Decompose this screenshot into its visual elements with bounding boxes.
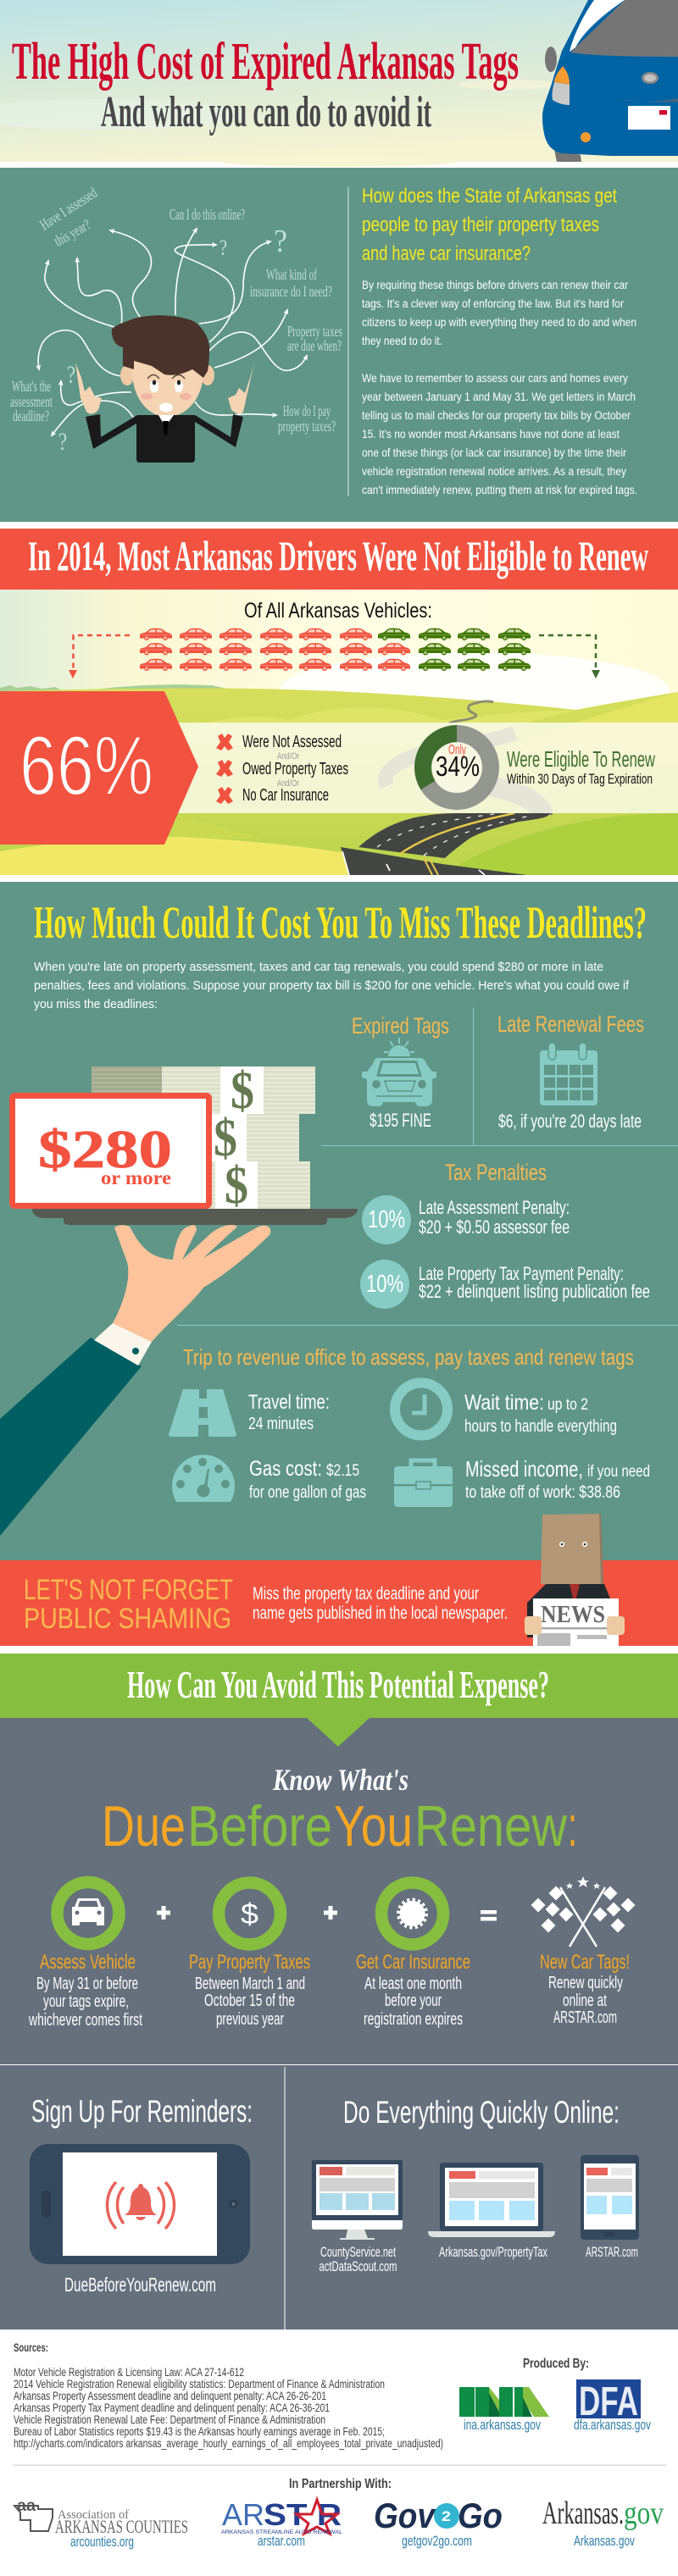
penalty 1: $20 + $0.50 assessor fee xyxy=(419,1216,570,1238)
question labels: How do I pay xyxy=(283,402,331,419)
logo: Gov2Go xyxy=(374,2496,503,2535)
panel: footer: arstar.com xyxy=(258,2533,305,2549)
illustration: man with bag and newspaper xyxy=(525,1514,625,1646)
travel time xyxy=(248,1391,330,1433)
brand heading xyxy=(102,1794,577,1859)
icon: x marks xyxy=(216,734,233,804)
illustration: cash stacks: $ xyxy=(225,1157,248,1215)
missed income xyxy=(465,1456,650,1502)
logo: association of arkansas counties: ARKANSAS COUNTIES xyxy=(55,2516,188,2537)
sources: Arkansas Property Assessment deadline and delinquent penalty: ACA 26-26-201 xyxy=(14,2390,326,2402)
tax penalties: Tax Penalties xyxy=(445,1160,547,1185)
panel: footer: Arkansas.gov xyxy=(574,2533,635,2549)
logo: Arkansas.gov: gov xyxy=(624,2496,664,2531)
sources: Sources: xyxy=(14,2341,48,2354)
intro heading: people to pay their property taxes xyxy=(362,213,599,236)
brand heading: You xyxy=(334,1794,413,1859)
step: pay property taxes: previous year xyxy=(216,2010,284,2029)
step: pay property taxes: Pay Property Taxes xyxy=(189,1951,310,1974)
sources: Arkansas Property Tax Payment deadline and delinquent penalty: ACA 26-36-201 xyxy=(14,2401,330,2414)
tax penalties xyxy=(360,1160,650,1309)
illustration: cash stacks: $ xyxy=(231,1062,254,1120)
donut chart: 34 percent xyxy=(423,734,491,801)
late renewal fees xyxy=(497,1011,644,1132)
site labels xyxy=(319,2244,638,2274)
logo: Gov2Go: 2 xyxy=(442,2508,451,2524)
panel: header xyxy=(0,0,678,167)
reasons list: And/Or xyxy=(277,751,299,762)
logo: association of arkansas counties xyxy=(14,2497,188,2537)
online services xyxy=(312,2095,639,2274)
question labels: insurance do I need? xyxy=(250,283,332,300)
logo: Gov2Go: Go xyxy=(458,2496,503,2535)
intro body text: telling us to mail checks for our property tax bills by October xyxy=(362,409,631,422)
intro body text: citizens to keep up with everything they need to do and when xyxy=(362,316,636,329)
question labels: Can I do this online? xyxy=(170,206,245,223)
step: assess vehicle xyxy=(28,1882,142,2030)
penalty 1: Late Assessment Penalty: xyxy=(419,1197,570,1218)
brand heading: Renew xyxy=(414,1794,568,1859)
step: assess vehicle: By May 31 or before xyxy=(36,1975,138,1993)
icon: car xyxy=(58,1882,119,1944)
question labels: property taxes? xyxy=(278,418,336,435)
step: new car tags xyxy=(531,1876,635,2027)
trip to revenue office xyxy=(169,1344,650,1507)
logo: Arkansas.gov: Arkansas. xyxy=(542,2496,624,2531)
donut chart: 34 percent: 34% xyxy=(436,751,480,782)
question labels: deadline? xyxy=(13,407,49,424)
panel: public shaming xyxy=(0,1514,678,1646)
intro body text: they need to do it. xyxy=(362,335,442,347)
arrow: dashed red xyxy=(69,635,130,679)
step: new car tags: ARSTAR.com xyxy=(553,2008,617,2027)
icon: plus xyxy=(324,1906,337,1920)
donut chart: 34 percent: Only xyxy=(448,743,466,757)
site labels: ARSTAR.com xyxy=(586,2244,638,2260)
wait time xyxy=(464,1391,617,1436)
reminders: DueBeforeYouRenew.com xyxy=(64,2274,216,2296)
callout: public shaming heading: PUBLIC SHAMING xyxy=(24,1603,231,1635)
intro body text: can't immediately renew, putting them at risk for expired tags. xyxy=(362,484,637,496)
wait time: Wait time: xyxy=(464,1391,544,1415)
callout: 66 percent: 66% xyxy=(19,718,153,812)
icon: calendar xyxy=(540,1043,597,1105)
man suit and hands xyxy=(75,363,254,463)
gas cost: $2.15 xyxy=(326,1462,359,1480)
logo: ARSTAR xyxy=(221,2497,343,2535)
panel: cost of missing deadlines xyxy=(0,882,678,1560)
step: get car insurance xyxy=(356,1882,470,2029)
panel: 2014 eligibility xyxy=(0,529,678,875)
reasons list: Owed Property Taxes xyxy=(242,760,348,778)
gas cost: for one gallon of gas xyxy=(249,1483,366,1502)
site labels: actDataScout.com xyxy=(319,2258,397,2274)
intro body text: one of these things (or lack car insurance) by the time their xyxy=(362,446,626,459)
icon: dollar: $ xyxy=(241,1898,258,1931)
question labels: ? xyxy=(58,428,67,456)
gas cost xyxy=(249,1457,366,1502)
callout: 66 percent xyxy=(0,691,198,845)
panel: how can you avoid xyxy=(0,1654,678,1718)
penalty 1: 10% xyxy=(368,1206,405,1233)
step: get car insurance: At least one month xyxy=(364,1975,462,1993)
partnership heading: In Partnership With: xyxy=(289,2477,392,2491)
step: pay property taxes xyxy=(189,1882,310,2029)
sources xyxy=(14,2341,443,2450)
gas cost: Gas cost: xyxy=(249,1457,322,1481)
logo: ARSTAR: AR xyxy=(222,2497,264,2532)
step: get car insurance: Get Car Insurance xyxy=(356,1951,470,1974)
body text: you miss the deadlines: xyxy=(34,998,158,1011)
illustration: hills and road xyxy=(0,684,678,875)
penalty 1 xyxy=(362,1195,570,1244)
icon: equals xyxy=(481,1910,497,1921)
body text: When you're late on property assessment, taxes and car tag renewals, you could spend $280 or more in late xyxy=(34,961,603,974)
intro body text: vehicle registration renewal notice arrives. As a result, they xyxy=(362,465,626,478)
produced by xyxy=(459,2357,651,2433)
sources: Bureau of Labor Statistics reports $19.43 is the Arkansas hourly earnings average in Feb. 2015; xyxy=(14,2425,385,2438)
logo: Gov2Go: Gov xyxy=(374,2496,436,2535)
intro body text: We have to remember to assess our cars and homes every xyxy=(362,372,628,385)
logo: association of arkansas counties: aa xyxy=(17,2497,36,2515)
icon: police car xyxy=(362,1038,436,1106)
question labels: What's the xyxy=(12,378,51,395)
illustration: confused man with arrows xyxy=(38,229,307,463)
body text xyxy=(34,961,630,1011)
text: newspaper note: name gets published in the local newspaper. xyxy=(253,1604,508,1623)
eligible label xyxy=(507,746,655,787)
produced by: ina.arkansas.gov xyxy=(464,2417,541,2433)
intro heading: How does the State of Arkansas get xyxy=(362,185,617,208)
script heading: Know What's xyxy=(272,1763,408,1797)
question labels: are due when? xyxy=(287,337,342,354)
icon: briefcase xyxy=(394,1460,453,1507)
icon: road xyxy=(169,1389,236,1437)
man hair and head xyxy=(112,315,214,417)
sources: Vehicle Registration Renewal Late Fee: Department of Finance & Administration xyxy=(14,2413,325,2426)
site labels: Arkansas.gov/PropertyTax xyxy=(439,2244,547,2260)
panel: footer: arcounties.org xyxy=(70,2534,134,2550)
callout: public shaming heading xyxy=(24,1574,233,1635)
heading: of all vehicles: Of All Arkansas Vehicles: xyxy=(244,599,432,623)
question labels: What kind of xyxy=(266,266,317,283)
expired tags: Expired Tags xyxy=(352,1013,449,1039)
icon: checkered flags xyxy=(531,1876,635,1947)
text: newspaper note xyxy=(253,1584,508,1623)
callout: 280 dollars: or more xyxy=(101,1167,171,1188)
question labels: Have I assessed xyxy=(36,184,100,233)
logo: association of arkansas counties: Association of xyxy=(58,2508,129,2522)
produced by: Produced By: xyxy=(523,2357,589,2371)
icon: tablet xyxy=(581,2155,639,2240)
icon: phone with bell xyxy=(30,2144,250,2264)
panel: footer: getgov2go.com xyxy=(402,2533,472,2549)
illustration: cash stacks xyxy=(92,1062,315,1215)
site labels: CountyService.net xyxy=(320,2244,396,2260)
intro body text xyxy=(362,279,637,496)
brand heading: Before xyxy=(187,1794,332,1859)
step: assess vehicle: Assess Vehicle xyxy=(40,1951,136,1974)
step: get car insurance: before your xyxy=(385,1992,442,2010)
body text: penalties, fees and violations. Suppose your property tax bill is $200 for one vehicle. Here's what you could owe if xyxy=(34,979,630,993)
brand heading: Due xyxy=(102,1794,186,1859)
callout: 280 dollars: $280 xyxy=(38,1119,172,1179)
panel: how does the state get people to pay xyxy=(0,168,678,522)
dividers xyxy=(177,1007,678,1325)
translucent band xyxy=(170,723,678,813)
step: assess vehicle: your tags expire, xyxy=(43,1992,129,2011)
question labels: this year? xyxy=(51,216,93,249)
arrow: dashed green xyxy=(539,635,600,679)
question labels: ? xyxy=(67,361,75,389)
illustration: cash stacks: $ xyxy=(214,1110,237,1167)
panel: due before you renew xyxy=(0,1718,678,2329)
sources: http://ycharts.com/indicators arkansas_average_hourly_earnings_of_all_employees_total_private_unadjusted) xyxy=(14,2437,443,2450)
illustration: blue car rear xyxy=(542,0,678,162)
wait time: up to 2 xyxy=(547,1396,588,1414)
logo: ARSTAR: ARKANSAS STREAMLINE AUTO RENEWAL xyxy=(221,2530,343,2535)
logo: INA xyxy=(459,2387,549,2417)
reasons list: No Car Insurance xyxy=(242,786,329,805)
question labels xyxy=(10,184,342,456)
penalty 2 xyxy=(360,1260,650,1309)
text: newspaper note: Miss the property tax deadline and your xyxy=(253,1584,479,1604)
logo: DFA: DFA xyxy=(579,2379,638,2424)
sources: Motor Vehicle Registration & Licensing Law: ACA 27-14-612 xyxy=(14,2366,244,2379)
icon: clock xyxy=(395,1382,447,1435)
icon: desktop xyxy=(312,2160,403,2240)
illustration: tray xyxy=(32,1209,358,1225)
step: new car tags: online at xyxy=(563,1992,607,2010)
question labels: assessment xyxy=(10,393,53,410)
reasons list xyxy=(216,733,348,805)
icon: badge xyxy=(381,1882,443,1945)
icon: gauge xyxy=(172,1454,235,1502)
question labels: ? xyxy=(220,235,227,260)
step: assess vehicle: whichever comes first xyxy=(28,2011,142,2030)
reasons list: And/Or xyxy=(277,778,299,789)
expired tags: $195 FINE xyxy=(370,1110,431,1131)
intro heading: and have car insurance? xyxy=(362,242,531,265)
step: new car tags: New Car Tags! xyxy=(540,1951,630,1974)
step: new car tags: Renew quickly xyxy=(548,1974,623,1992)
icon: plus xyxy=(157,1906,170,1920)
vehicle pictogram xyxy=(140,629,531,671)
intro body text: By requiring these things before drivers can renew their car xyxy=(362,279,628,291)
callout: 280 dollars xyxy=(12,1096,208,1206)
wait time: hours to handle everything xyxy=(464,1417,617,1436)
travel time: 24 minutes xyxy=(248,1415,314,1433)
expired tags xyxy=(352,1013,449,1131)
step: pay property taxes: Between March 1 and xyxy=(195,1975,305,1993)
step: get car insurance: registration expires xyxy=(364,2010,463,2029)
panel: footer xyxy=(0,2329,678,2576)
callout: public shaming heading: LET'S NOT FORGET xyxy=(24,1574,233,1606)
question labels: Property taxes xyxy=(287,323,342,340)
reasons list: Were Not Assessed xyxy=(242,733,342,751)
missed income: to take off of work: $38.86 xyxy=(465,1483,620,1502)
icon: dollar xyxy=(219,1882,281,1945)
illustration: sleeve and hand xyxy=(0,1225,270,1536)
reminders: Sign Up For Reminders: xyxy=(31,2094,253,2129)
icon: laptop xyxy=(428,2163,555,2237)
logo: ARSTAR: ST R xyxy=(264,2497,342,2532)
arrow: green pointer xyxy=(307,1718,370,1747)
question labels: ? xyxy=(274,224,287,259)
intro body text: 15. It's no wonder most Arkansans have not done at least xyxy=(362,428,620,440)
step: pay property taxes: October 15 of the xyxy=(204,1992,295,2010)
missed income: Missed income, xyxy=(465,1456,583,1482)
missed income: if you need xyxy=(587,1463,650,1481)
illustration: man with bag and newspaper: NEWS xyxy=(541,1602,605,1628)
intro body text: tags. It's a clever way of enforcing the law. But it's hard for xyxy=(362,297,624,310)
reminders xyxy=(30,2094,253,2296)
sources: 2014 Vehicle Registration Renewal eligibility statistics: Department of Finance & Administration xyxy=(14,2378,385,2390)
penalty 2: 10% xyxy=(366,1271,403,1298)
intro body text: year between January 1 and May 31. We get letters in March xyxy=(362,391,636,403)
brand heading: : xyxy=(568,1794,577,1859)
travel time: Travel time: xyxy=(248,1391,330,1414)
intro heading xyxy=(362,185,617,265)
